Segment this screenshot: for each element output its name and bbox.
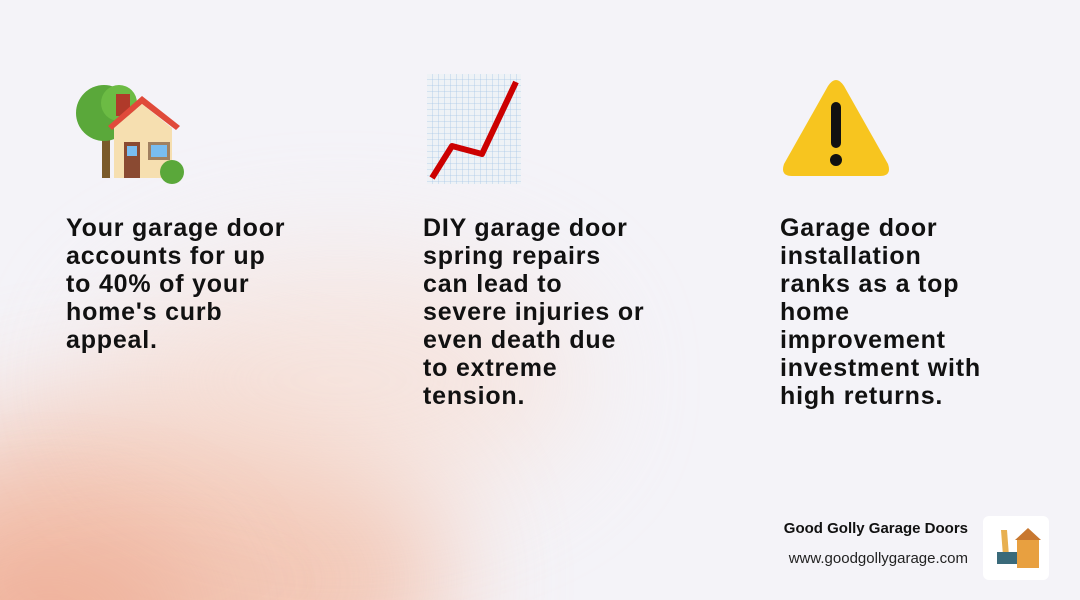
text: fact 2: DIY garage door <box>423 214 628 242</box>
brand name: Good Golly Garage Doors <box>784 520 968 537</box>
text: fact 3: improvement <box>780 326 946 354</box>
text: fact 2: to extreme <box>423 354 557 382</box>
text: fact 3 <box>780 214 981 410</box>
icon: chart increasing <box>427 74 521 184</box>
text: fact 3: Garage door <box>780 214 937 242</box>
text: fact 1: home's curb <box>66 298 222 326</box>
text: fact 2: tension. <box>423 382 525 410</box>
text: fact 2: can lead to <box>423 270 562 298</box>
text: fact 3: installation <box>780 242 922 270</box>
icon: warning <box>783 80 889 176</box>
text: fact 1: to 40% of your <box>66 270 249 298</box>
text: fact 2: spring repairs <box>423 242 601 270</box>
text: fact 2 <box>423 214 644 410</box>
text: fact 3: investment with <box>780 354 981 382</box>
text: fact 2: severe injuries or <box>423 298 644 326</box>
text: fact 1: accounts for up <box>66 242 266 270</box>
text: fact 2: even death due <box>423 326 616 354</box>
icon: house with tree <box>76 85 184 184</box>
text: fact 3: high returns. <box>780 382 943 410</box>
text: fact 3: ranks as a top <box>780 270 959 298</box>
website: www.goodgollygarage.com <box>789 550 968 567</box>
text: fact 3: home <box>780 298 850 326</box>
brand footer <box>784 516 1049 580</box>
text: fact 1 <box>66 214 285 354</box>
logo <box>983 516 1049 580</box>
text: fact 1: Your garage door <box>66 214 285 242</box>
text: fact 1: appeal. <box>66 326 158 354</box>
